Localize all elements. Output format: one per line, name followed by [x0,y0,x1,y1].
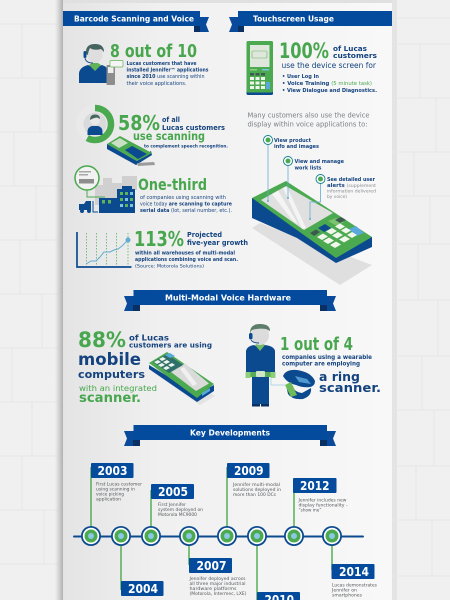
stat: 1 out of 4 ring scanner [246,324,381,406]
milestone 2007: (Motorola, Intermec, LXE) [190,591,247,597]
stat: 100% touchscreen: • User Log In [282,74,319,80]
stat: 88% mobile computers: of Lucas [129,334,169,342]
stat: 8 out of 10: installed Jennifer™ applications [126,68,209,74]
stat: 113% five-year growth [77,227,248,270]
milestone 2014: Lucas demonstrates [332,582,378,588]
heading: Key Developments [124,425,336,446]
milestone 2009: 2009 [234,464,264,478]
callout: view product [264,136,319,202]
icon: ring scanner [283,370,315,399]
stat: 8 out of 10: their voice applications. [126,81,186,87]
stat: 8 out of 10: Lucas customers that have [126,61,197,67]
stat: one-third: One-third [138,175,207,194]
milestone 2014: Jennifer on [331,588,357,594]
stat: 88% mobile computers: computers [78,369,145,381]
stat: 58% use scanning [76,105,228,166]
stat: 88% mobile computers: 88% [78,328,126,352]
infographic paper panel [55,0,397,600]
milestone 2012: “show me” [298,508,322,514]
milestone 2014: 2014 [339,565,369,579]
stat: 58% use scanning: use scanning [133,129,205,143]
milestone 2005: Motorola MC9000 [158,512,197,518]
milestone 2012: Jennifer includes new [297,498,347,504]
timeline axis [74,536,363,538]
heading: Key Developments: Key Developments [190,428,270,438]
milestone 2009: Jennifer multi-modal [232,482,280,488]
connector stems [91,467,332,600]
milestone 2014 [331,564,378,598]
timeline [74,463,378,600]
milestone 2010 [257,592,300,600]
timeline nodes [81,526,342,546]
stat: 1 out of 4 ring scanner: a ring [319,369,360,384]
text: many customers intro: display within voice applications to: [248,120,368,128]
stat: 113% five-year growth: applications combining voice and scan. [135,257,238,263]
icon: green touchscreen device [246,41,273,95]
device body [252,181,372,263]
stat: 88% mobile computers: with an integrated [79,383,157,393]
stat: 100% touchscreen: customers [333,51,377,60]
stat: one-third: serial data (lot, serial number, etc.). [140,208,232,214]
stat: one-third: voice today are scanning to capture [140,202,233,208]
device shadow [252,223,372,285]
milestone 2003: using scanning in [96,486,135,492]
milestone 2007: hardware platforms [190,586,237,592]
icon: warehouse with barcode and forklift [75,166,137,213]
callout: detailed alerts: alerts (supplement [327,183,376,189]
stat: 1 out of 4 ring scanner: companies using a wearable [282,355,372,361]
callout: detailed alerts: by voice) [327,194,347,200]
stat: 88% mobile computers [78,328,215,406]
stat: 88% mobile computers: customers are using [129,340,212,350]
chart: 58% donut [76,105,114,143]
heading: Touchscreen Usage [229,11,392,32]
text: many customers intro [248,112,370,128]
stat: one-third [75,166,233,214]
stat: 113% five-year growth: (Source: Motorola Solutions) [135,264,204,270]
chart: growth line [77,232,132,267]
milestone 2012: display functionality - [298,502,348,508]
stat: 100% touchscreen: use the device screen for [282,61,377,70]
callout: detailed alerts: information delivered [327,188,376,194]
stat: 113% five-year growth: five-year growth [187,239,248,247]
stat: 100% touchscreen: 100% [279,39,329,63]
milestone 2003 [91,463,142,502]
milestone 2003: 2003 [98,464,128,478]
stat: 58% use scanning: 58% [118,111,160,135]
stat: 88% mobile computers: mobile [78,350,141,369]
stat: 58% use scanning: to complement speech recognition. [144,144,228,150]
milestone 2004: 2004 [128,582,158,596]
milestone 2007 [188,558,247,597]
heading: Barcode Scanning and Voice [63,11,209,32]
callout: detailed alerts: See detailed user [327,177,376,183]
stat: 113% five-year growth: within all warehouses of multi-modal [135,250,235,256]
callout: detailed alerts [309,174,376,220]
stat: 113% five-year growth: Projected [187,231,222,239]
milestone 2007: 2007 [196,559,226,573]
illustration: large handheld device with callouts [252,136,376,285]
milestone 2003: application [96,496,121,502]
stat: 1 out of 4 ring scanner: scanner. [319,380,381,395]
callout: view product: info and images [274,144,319,150]
callout: view product: View product [274,138,312,144]
milestone 2014: smartphones [332,592,363,598]
icon: mobile computer [149,352,215,405]
milestone 2003: voice picking [96,492,124,498]
milestone 2003: First Lucas customer [96,482,142,488]
callout: view and manage: work lists [294,166,322,172]
heading: Multi-Modal Voice Hardware [124,290,336,311]
milestone 2005: First Jennifer [158,502,186,508]
milestone 2009: more than 100 DCs [233,492,277,498]
heading: Barcode Scanning and Voice: Barcode Scanning and Voice [74,14,195,24]
stat: 113% five-year growth: 113% [134,227,184,251]
milestone 2012: 2012 [300,479,330,493]
milestone 2009: solutions deployed in [233,487,281,493]
milestone 2005: system deployed on [158,507,203,513]
stat: one-third: of companies using scanning with [140,195,226,201]
milestone 2012 [293,478,348,514]
icon: agent with headset and phone [79,44,123,85]
callout: view and manage: View and manage [294,159,345,165]
heading: Touchscreen Usage: Touchscreen Usage [253,14,335,24]
stat: 58% use scanning: Lucas customers [162,124,225,132]
icon: worker with wearable [246,324,285,406]
stat: 8 out of 10 [79,41,209,87]
stat: 100% touchscreen: • Voice Training (5 minute task) [282,81,372,87]
stat: 8 out of 10: 8 out of 10 [110,41,197,62]
milestone 2009 [227,463,281,498]
milestone 2005 [151,484,203,518]
milestone 2005: 2005 [158,485,188,499]
stat: 100% touchscreen [246,39,377,95]
stat: 88% mobile computers: scanner. [79,390,141,406]
icon: small handheld scanner [107,136,155,166]
stat: 58% use scanning: of all [162,116,180,124]
stat: 1 out of 4 ring scanner: computer are employing [282,362,360,368]
stat: 8 out of 10: since 2010 use scanning within [126,74,204,80]
milestone 2007: all three major industrial [190,581,246,587]
callout: view and manage [284,156,345,199]
heading: Multi-Modal Voice Hardware: Multi-Modal Voice Hardware [165,294,292,302]
stat: 100% touchscreen: • View Dialogue and Diagnostics. [282,88,377,94]
text: many customers intro: Many customers also use the device [248,112,370,120]
stat: 100% touchscreen: of Lucas [333,44,367,53]
milestone 2007: Jennifer deployed across [188,576,246,582]
stat: 1 out of 4 ring scanner: 1 out of 4 [280,335,353,355]
